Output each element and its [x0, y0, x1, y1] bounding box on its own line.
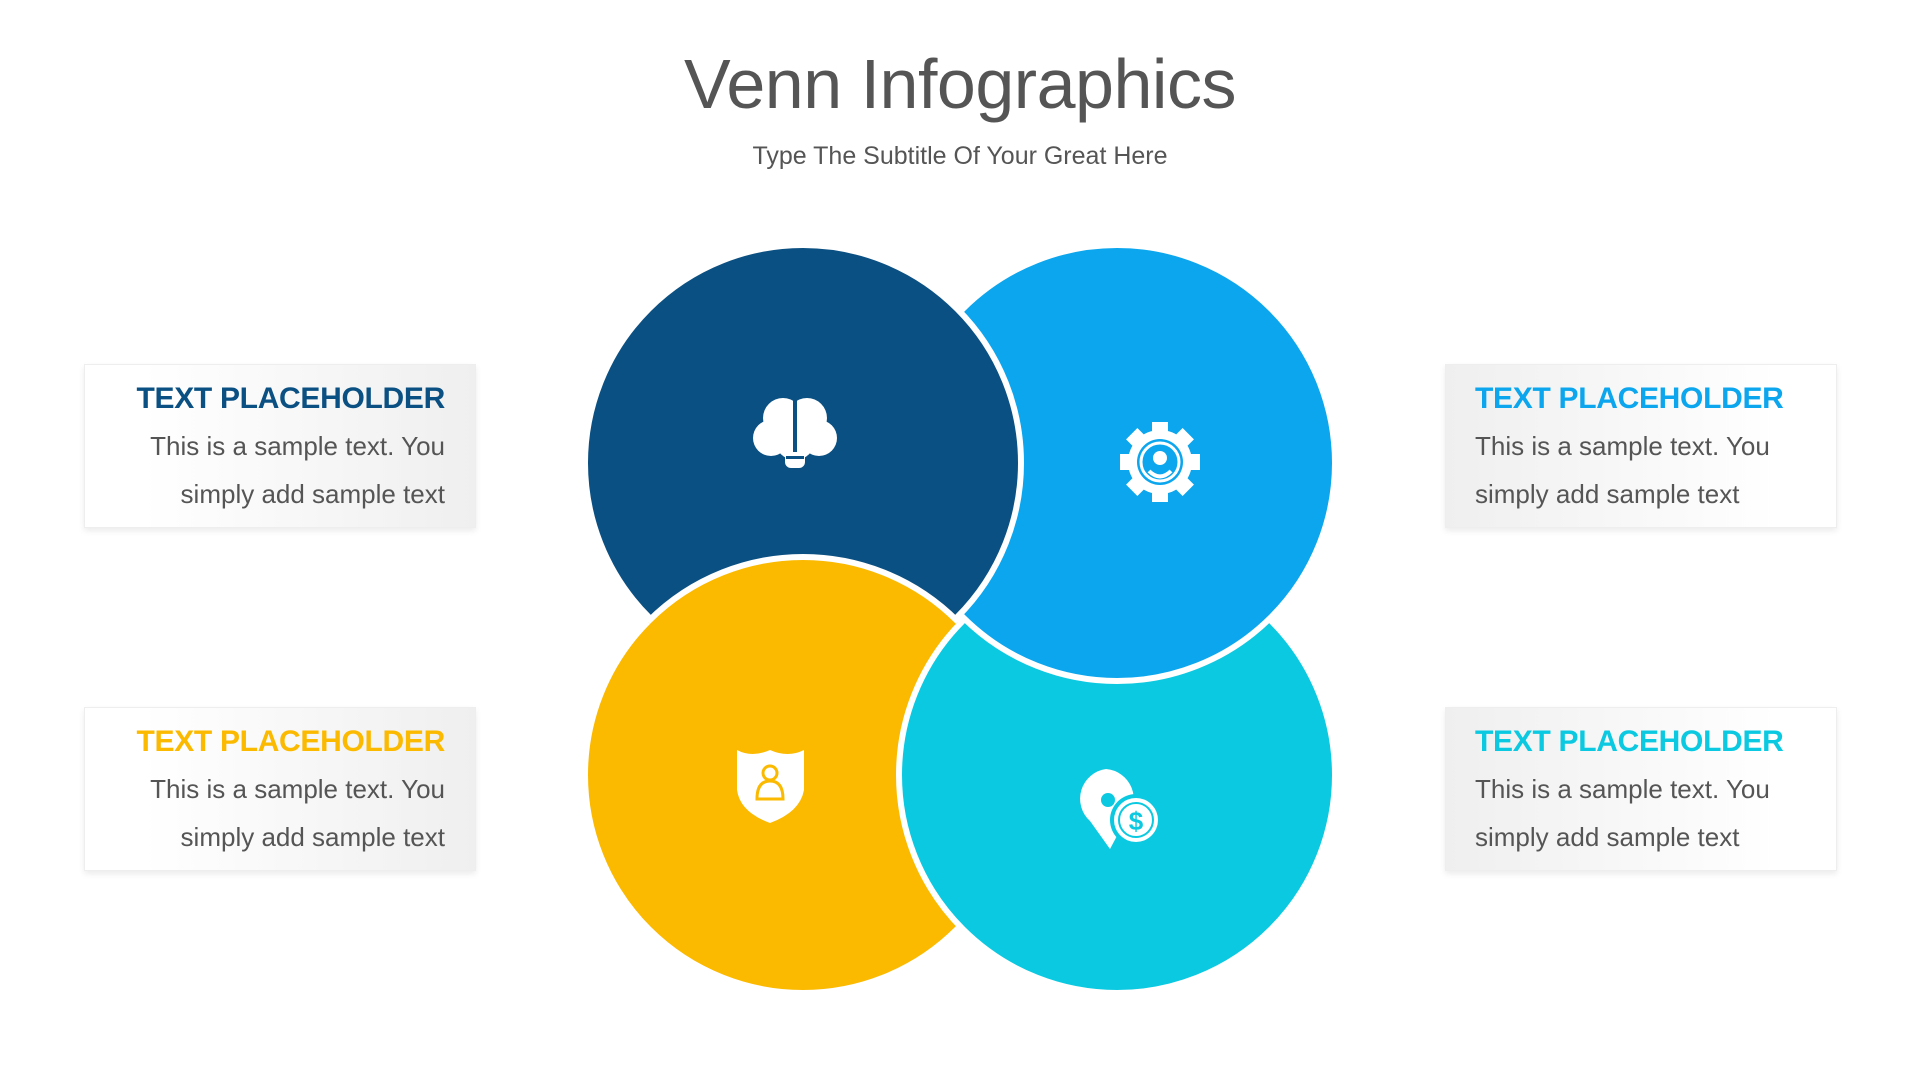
panel: bottom left: This is a sample text. You [150, 774, 445, 804]
panel: top right: This is a sample text. You [1475, 431, 1770, 461]
panel: bottom left [84, 707, 476, 871]
panel: bottom right: This is a sample text. You [1475, 774, 1770, 804]
bottom left overlapping top left [648, 554, 958, 684]
subtitle: Type The Subtitle Of Your Great Here [752, 142, 1168, 170]
circle: top left [585, 245, 1021, 681]
icon: location dollar [1080, 769, 1162, 849]
title: Venn Infographics [684, 45, 1236, 123]
icon: brain bulb [753, 392, 837, 468]
circle: bottom left [585, 557, 1021, 993]
icon: gear person [1120, 422, 1200, 502]
panel: bottom left: simply add sample text [181, 822, 445, 852]
circle: bottom right [899, 557, 1335, 993]
panel: top right: TEXT PLACEHOLDER [1475, 382, 1784, 415]
panel: top left: TEXT PLACEHOLDER [136, 382, 445, 415]
panel: top left: This is a sample text. You [150, 431, 445, 461]
panel: top right: simply add sample text [1475, 479, 1739, 509]
panel: bottom right [1445, 707, 1837, 871]
icon: location dollar: $ [1129, 806, 1144, 836]
icon: shield person [737, 750, 804, 823]
panel: bottom left: TEXT PLACEHOLDER [136, 725, 445, 758]
panel: top right [1445, 364, 1837, 528]
panel: top left: simply add sample text [181, 479, 445, 509]
panel: bottom right: simply add sample text [1475, 822, 1739, 852]
circle: top right [899, 245, 1335, 681]
venn diagram [588, 248, 1332, 990]
panel: top left [84, 364, 476, 528]
panel: bottom right: TEXT PLACEHOLDER [1475, 725, 1784, 758]
